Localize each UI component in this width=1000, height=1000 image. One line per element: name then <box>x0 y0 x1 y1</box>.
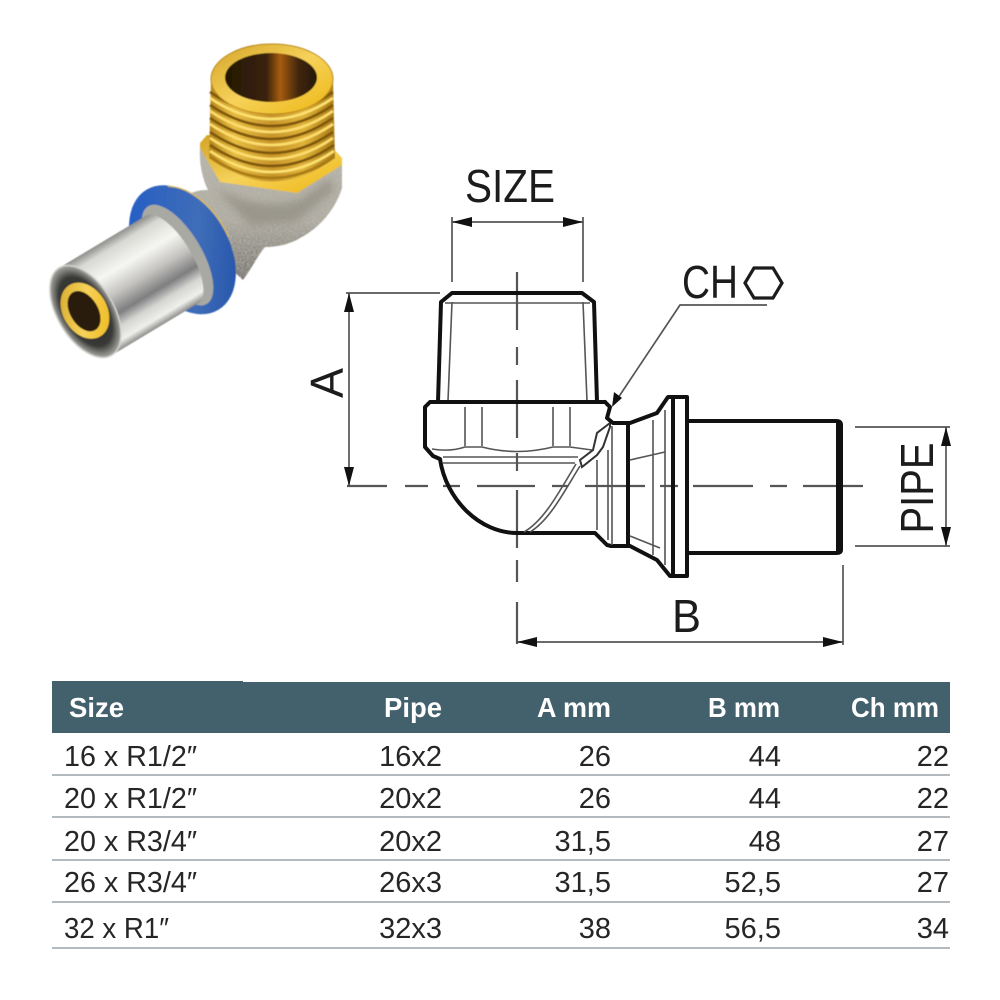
row 4: 52,5 <box>725 867 781 899</box>
yellow seam on collar <box>168 172 230 251</box>
table header: Size <box>69 692 124 723</box>
dimension A <box>301 293 440 486</box>
row 1: 44 <box>749 741 781 773</box>
dimension B: B <box>672 590 701 642</box>
row 1: 22 <box>917 741 949 773</box>
table header: Pipe <box>384 692 442 723</box>
table header <box>52 681 950 733</box>
row 4: 26 x R3/4″ <box>64 867 197 899</box>
body shadow under hex <box>215 178 334 225</box>
product photo: elbow fitting <box>24 44 342 383</box>
row 5: 56,5 <box>725 913 781 945</box>
row 5: 38 <box>579 913 611 945</box>
row 3: 48 <box>749 826 781 858</box>
row 2: 20 x R1/2″ <box>64 783 197 815</box>
table header: A mm <box>537 692 611 723</box>
thread inner lines <box>445 302 590 401</box>
row 1 <box>64 741 949 773</box>
dimension CH with hexagon: CH <box>682 256 738 308</box>
row 3: 20 x R3/4″ <box>64 826 197 858</box>
row 3: 31,5 <box>555 826 611 858</box>
row 4 <box>64 867 949 899</box>
brass hex nut <box>200 135 342 193</box>
row 5: 32 x R1″ <box>64 913 169 945</box>
row 2: 26 <box>579 783 611 815</box>
pipe sleeve and blue ring <box>24 165 259 383</box>
row 4: 27 <box>917 867 949 899</box>
row 4: 26x3 <box>379 867 442 899</box>
row 1: 16 x R1/2″ <box>64 741 197 773</box>
blue collar <box>107 166 258 333</box>
row 2 <box>64 783 949 815</box>
dimension B <box>517 565 843 647</box>
table header: Ch mm <box>851 692 939 723</box>
row 3: 20x2 <box>379 826 442 858</box>
silver sleeve <box>59 206 215 355</box>
dimension PIPE: PIPE <box>891 442 943 534</box>
elbow shoulder <box>580 423 610 467</box>
threaded neck outline <box>438 293 597 402</box>
row dividers <box>52 775 950 948</box>
hex nut outline <box>425 402 628 546</box>
dimension SIZE: SIZE <box>465 160 555 212</box>
dimension A: A <box>301 368 353 398</box>
row 4: 31,5 <box>555 867 611 899</box>
brass threaded neck <box>209 80 335 182</box>
collar and flange <box>605 397 687 576</box>
row 5: 32x3 <box>379 913 442 945</box>
specification table <box>52 681 950 948</box>
dimension SIZE <box>452 160 583 282</box>
table header: B mm <box>708 692 780 723</box>
row 1: 26 <box>579 741 611 773</box>
dimension CH with hexagon <box>612 256 782 407</box>
row 5: 34 <box>917 913 949 945</box>
row 5 <box>64 913 949 945</box>
nickel elbow body <box>186 147 342 280</box>
dimension PIPE <box>855 427 951 546</box>
row 1: 16x2 <box>379 741 442 773</box>
row 2: 44 <box>749 783 781 815</box>
sleeve mouth <box>35 253 136 370</box>
brass top rim <box>211 44 333 114</box>
row 3 <box>64 826 949 858</box>
row 2: 20x2 <box>379 783 442 815</box>
row 3: 27 <box>917 826 949 858</box>
row 2: 22 <box>917 783 949 815</box>
press sleeve <box>687 421 841 553</box>
thread ridges <box>210 92 334 178</box>
hex facets <box>432 407 592 532</box>
technical drawing of fitting <box>301 160 951 647</box>
centre lines <box>347 485 863 487</box>
brass insert <box>51 274 119 348</box>
